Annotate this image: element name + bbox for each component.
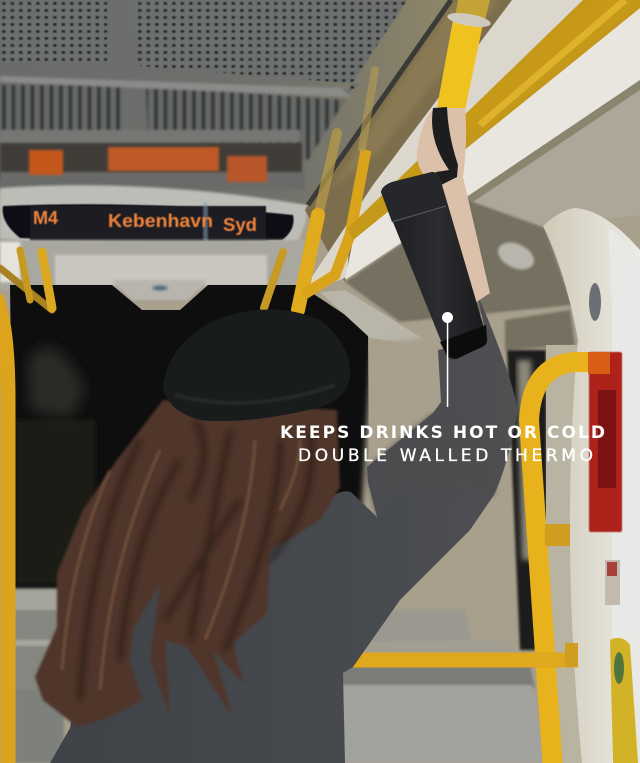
thermo flask [381,172,487,359]
upper display [29,147,267,182]
stairs floor [14,588,545,763]
display text [33,208,257,235]
right upper structure: wedge, white bands, ceiling panels [300,0,640,763]
ceiling panel under display [0,240,305,300]
callout dot [442,312,453,323]
strap [432,107,458,185]
callout line [447,320,448,407]
rail grey collar [446,10,492,30]
door post [543,208,640,763]
main diagonal gold rail [348,0,640,240]
coat [50,293,518,763]
dark rear of carriage [10,285,370,610]
caption line 2: DOUBLE WALLED THERMO [298,446,593,466]
hair [35,400,340,727]
display text: Kebenhavn [108,210,213,231]
ceiling [0,0,452,205]
display text: Syd [223,214,257,235]
caption line 1: KEEPS DRINKS HOT OR COLD [280,423,605,443]
beret [163,309,350,421]
orange bracket on rail [588,352,610,374]
vertical yellow grab bar [437,20,483,110]
grab bar top section [455,0,490,20]
ceiling dark line [308,0,451,205]
lower display frame [0,185,306,252]
display text: M4 [33,208,58,228]
arm and hand [417,108,490,305]
